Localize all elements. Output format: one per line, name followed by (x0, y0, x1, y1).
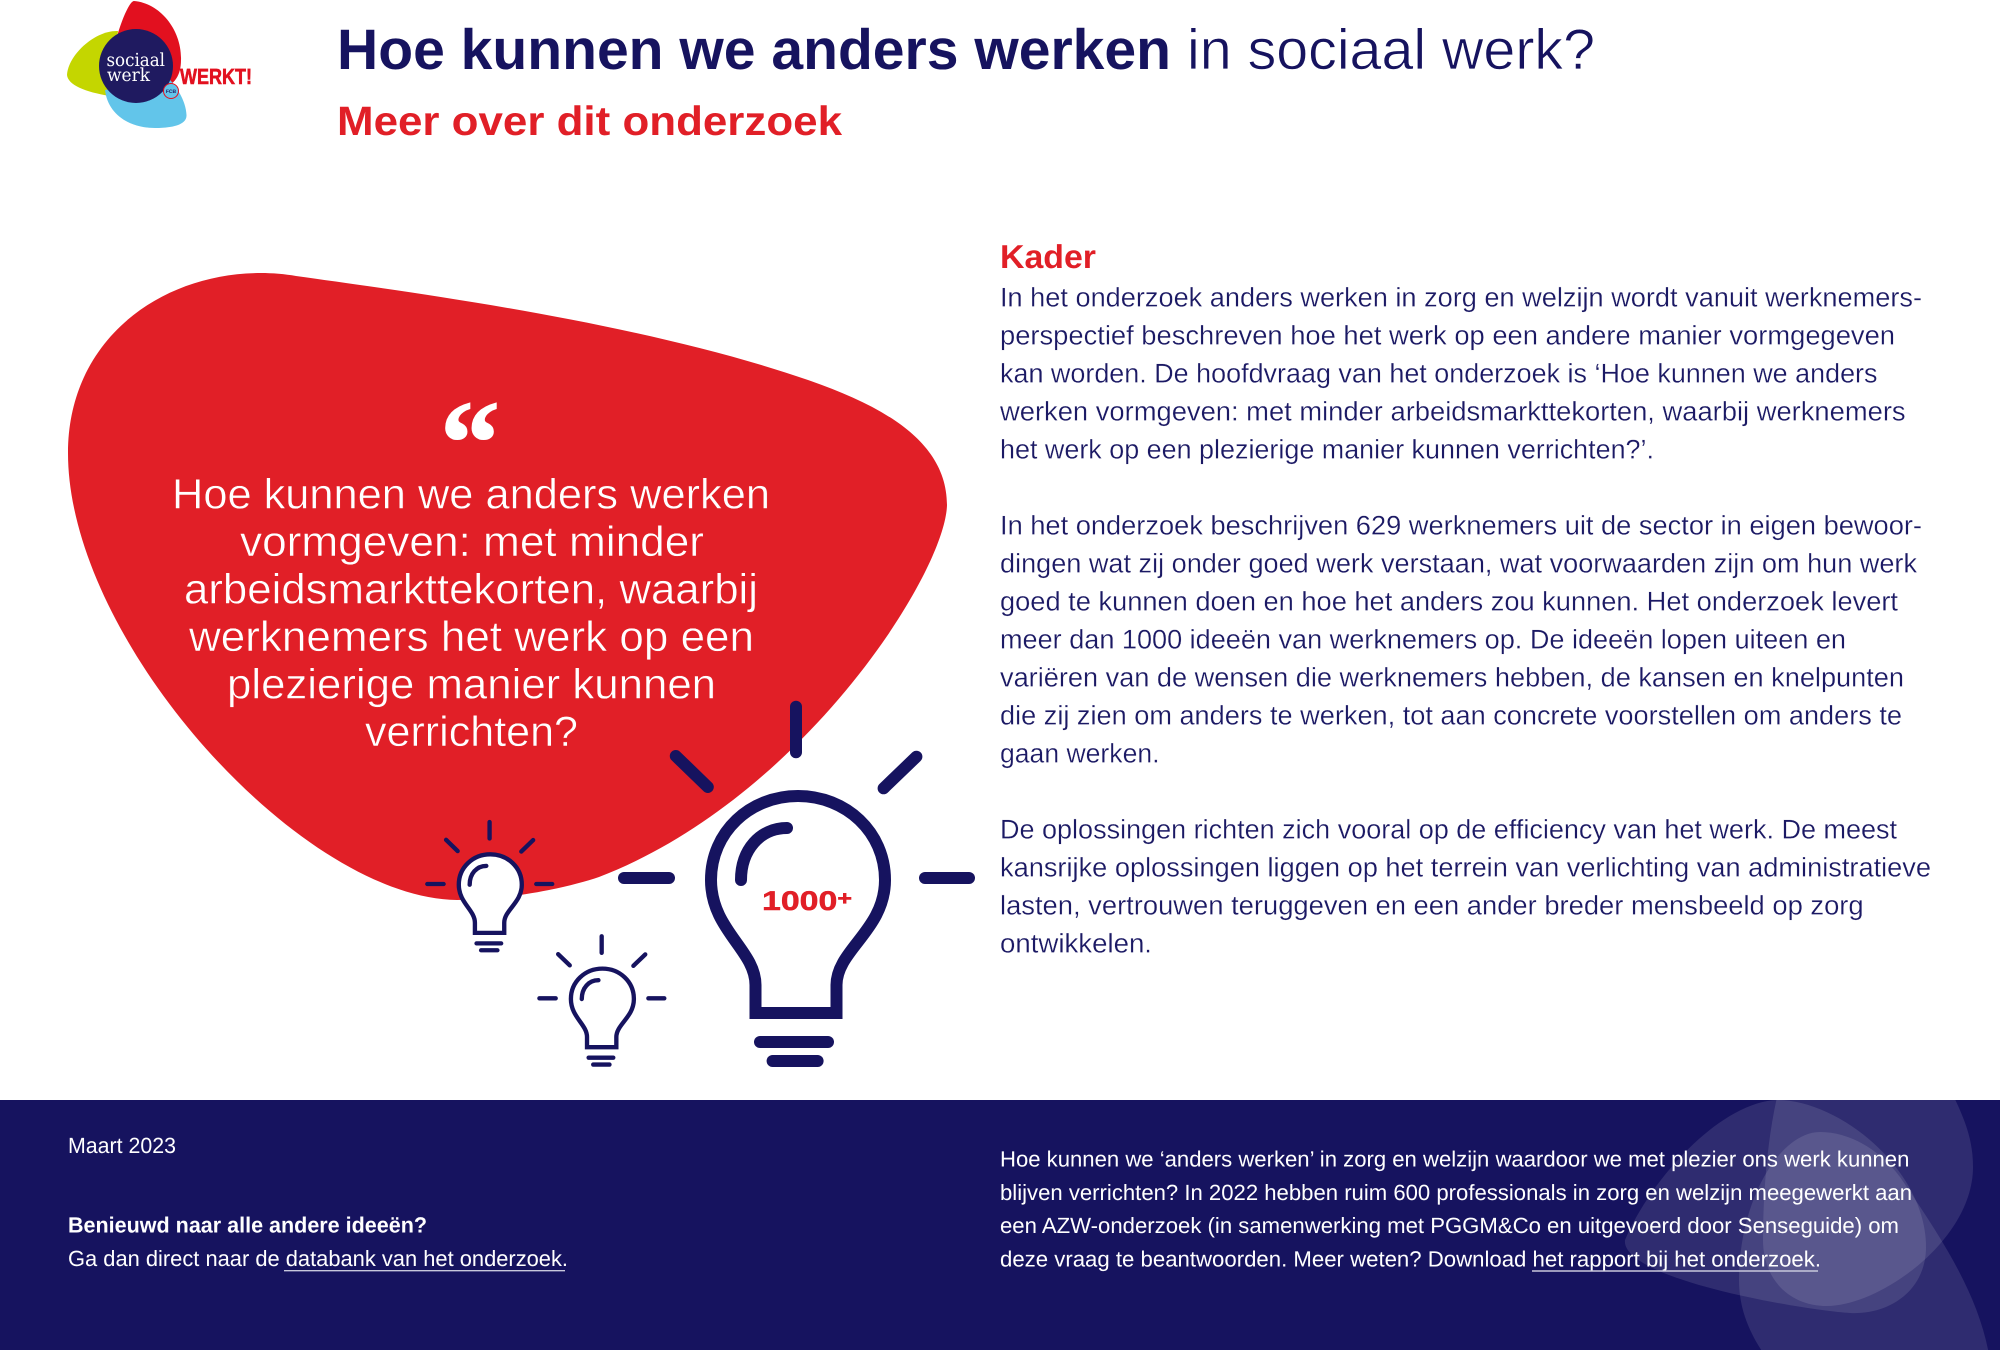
text block: paragraph 2: die zij zien om anders te werken, tot aan concrete voorstellen om anders te (1000, 701, 1902, 731)
logo: sociaal werk werkt: werk (107, 65, 151, 86)
quote text: verrichten? (365, 709, 578, 756)
icon: large light bulb with 1000+ (624, 707, 969, 1061)
icon: large light bulb with 1000+: + (837, 888, 852, 910)
text block: paragraph 2: dingen wat zij onder goed werk verstaan, wat voorwaarden zijn om hun werk (1000, 549, 1917, 579)
quote text: plezierige manier kunnen (227, 662, 716, 708)
footer call to action (68, 1213, 568, 1271)
quote text: werknemers het werk op een (188, 614, 754, 661)
text block: paragraph 3: De oplossingen richten zich vooral op de efficiency van het werk. De meest (1000, 815, 1897, 845)
footer description text: Hoe kunnen we ‘anders werken’ in zorg en welzijn waardoor we met plezier ons werk kunnen (1000, 1147, 1909, 1172)
red quote blob (68, 273, 947, 900)
text block: paragraph 1: het werk op een plezierige manier kunnen verrichten?’. (1000, 435, 1654, 465)
footer date: Maart 2023 (68, 1133, 176, 1158)
text block: paragraph 3 (1000, 815, 1931, 959)
quote text: vormgeven: met minder (240, 519, 704, 566)
quotation mark: “ (440, 376, 500, 509)
text block: paragraph 2: In het onderzoek beschrijven 629 werknemers uit de sector in eigen bewoor- (1000, 511, 1922, 541)
text block: paragraph 3: kansrijke oplossingen liggen op het terrein van verlichting van administratieve (1000, 853, 1931, 883)
text block: paragraph 2: goed te kunnen doen en hoe het anders zou kunnen. Het onderzoek levert (1000, 587, 1899, 617)
quote text: Hoe kunnen we anders werken (172, 472, 770, 518)
text block: paragraph 1: perspectief beschreven hoe het werk op een andere manier vormgegeven (1000, 321, 1895, 351)
title (337, 18, 1595, 82)
text block: paragraph 2 (1000, 511, 1922, 769)
logo: sociaal werk werkt: sociaal (106, 50, 165, 71)
title: in sociaal werk? (1187, 18, 1595, 82)
logo: sociaal werk werkt: WERKT! (180, 64, 252, 89)
text block: paragraph 1: In het onderzoek anders werken in zorg en welzijn wordt vanuit werknemers- (1000, 283, 1922, 313)
logo: sociaal werk werkt (67, 1, 252, 128)
text block: paragraph 2: variëren van de wensen die werknemers hebben, de kansen en knelpunten (1000, 663, 1904, 693)
icon: small light bulb on blob (427, 822, 552, 950)
footer decorative logo shapes (1625, 1085, 1990, 1350)
icon: small light bulb below blob (539, 936, 664, 1065)
footer description text: blijven verrichten? In 2022 hebben ruim 600 professionals in zorg en welzijn meegewerkt aan (1000, 1180, 1912, 1205)
heading: Kader: Kader (1000, 238, 1096, 275)
text block: paragraph 1: werken vormgeven: met minder arbeidsmarkttekorten, waarbij werknemers (999, 397, 1906, 427)
icon: large light bulb with 1000+: 1000 (762, 886, 822, 916)
title: Hoe kunnen we anders werken (337, 18, 1171, 82)
subtitle: Meer over dit onderzoek (337, 98, 842, 144)
text block: paragraph 1 (999, 283, 1922, 465)
text block: paragraph 3: ontwikkelen. (1000, 929, 1152, 959)
quote text: arbeidsmarkttekorten, waarbij (184, 566, 758, 614)
text block: paragraph 2: meer dan 1000 ideeën van werknemers op. De ideeën lopen uiteen en (1000, 625, 1846, 655)
text block: paragraph 2: gaan werken. (1000, 739, 1160, 769)
footer description text: deze vraag te beantwoorden. Meer weten? Download het rapport bij het onderzoek. (1000, 1247, 1821, 1272)
footer call to action: Ga dan direct naar de databank van het onderzoek. (68, 1246, 568, 1271)
footer description text (1000, 1147, 1912, 1272)
panel: footer band (0, 1085, 2000, 1350)
footer description text: een AZW-onderzoek (in samenwerking met PGGM&Co en uitgevoerd door Senseguide) om (1000, 1213, 1899, 1238)
logo: sociaal werk werkt: FCB (166, 89, 177, 95)
text block: paragraph 1: kan worden. De hoofdvraag van het onderzoek is ‘Hoe kunnen we anders (1000, 359, 1878, 389)
quote text (172, 472, 770, 756)
text block: paragraph 3: lasten, vertrouwen teruggeven en een ander breder mensbeeld op zorg (1000, 891, 1864, 921)
footer call to action: Benieuwd naar alle andere ideeën? (68, 1213, 427, 1238)
